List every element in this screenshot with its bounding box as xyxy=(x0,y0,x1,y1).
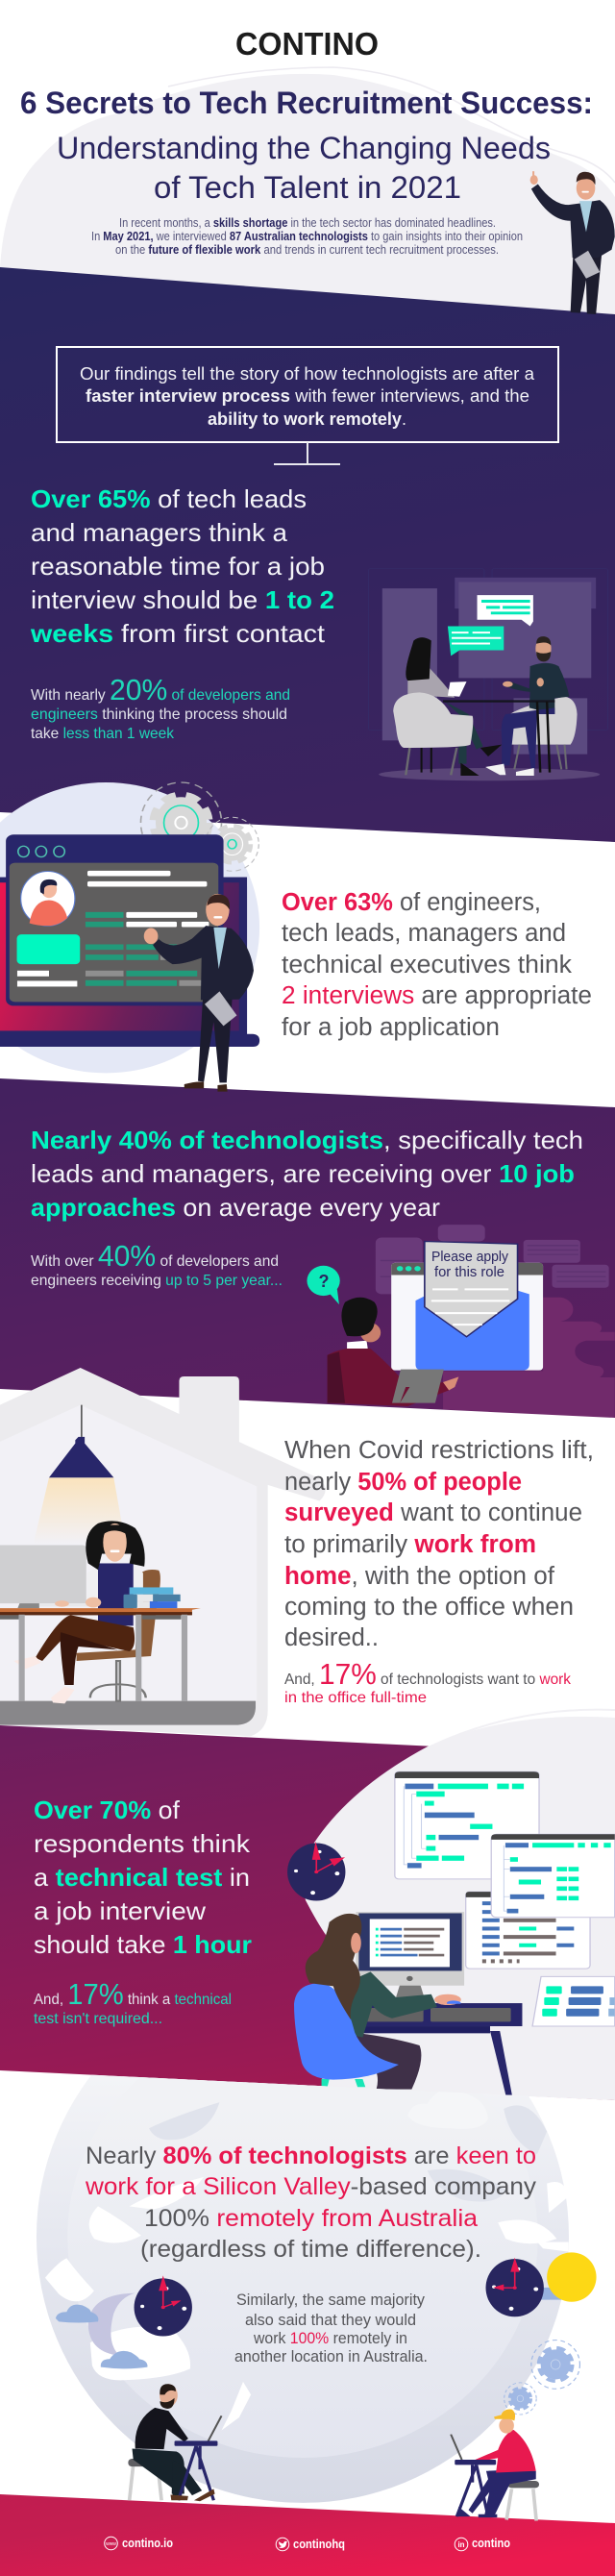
house shell xyxy=(0,1368,326,1736)
callout box xyxy=(57,347,558,464)
white panel: work from home xyxy=(0,1389,615,1755)
text: work from home: When Covid restrictions lift, xyxy=(284,1437,594,1464)
laptop lid and base xyxy=(0,878,247,1035)
footer link: twitter xyxy=(276,2538,345,2551)
text: 17% office: in the office full-time xyxy=(284,1690,427,1706)
callout text xyxy=(80,363,535,429)
title line 2: Understanding the Changing Needs xyxy=(57,131,551,165)
code window 3 xyxy=(466,1892,590,1969)
white panel: Silicon Valley xyxy=(0,2070,615,2523)
footer link: twitter: continohq xyxy=(293,2538,345,2551)
text: similarly xyxy=(234,2291,428,2365)
illustration: time zones and remote workers xyxy=(56,2252,597,2521)
footer link: linkedin: contino xyxy=(472,2537,510,2550)
callout text: faster interview process with fewer interviews, and the xyxy=(86,385,529,406)
text: over 70%: should take 1 hour xyxy=(34,1930,252,1959)
monitor xyxy=(0,1545,86,1608)
text: over 65%: interview should be 1 to 2 xyxy=(31,585,334,614)
presenter man xyxy=(144,894,254,1092)
clock left xyxy=(135,2275,192,2337)
illustration background: technical test blob xyxy=(303,1710,615,2100)
intro paragraph: In recent months, a skills shortage in the tech sector has dominated headlines. xyxy=(119,216,496,230)
text: over 65%: and managers think a xyxy=(31,518,288,547)
browser window xyxy=(391,1263,543,1371)
decorative cloud behind job approaches illustration xyxy=(443,1298,615,1419)
table xyxy=(443,700,554,703)
question mark: ? xyxy=(319,1272,329,1291)
monitor xyxy=(356,1912,464,1997)
lamp xyxy=(34,1405,126,1544)
moon xyxy=(88,2293,135,2356)
chair back right xyxy=(509,697,578,745)
code window 2 xyxy=(491,1834,615,1918)
floor xyxy=(379,768,600,780)
cloud left 1 xyxy=(56,2305,98,2323)
app window xyxy=(6,834,224,1005)
clock right xyxy=(486,2258,544,2316)
person xyxy=(328,1348,449,1406)
title line 3: of Tech Talent in 2021 xyxy=(154,170,461,205)
text: over 70% xyxy=(34,1796,252,1959)
text: 17% technical test xyxy=(34,1977,232,2027)
text: over 65%: Over 65% of tech leads xyxy=(31,484,307,513)
sun xyxy=(547,2252,597,2302)
intro paragraph: In May 2021, we interviewed 87 Australian technologists to gain insights into their opinion xyxy=(91,230,523,243)
interior xyxy=(0,1405,257,1701)
question bubble xyxy=(307,1266,340,1296)
cloud xyxy=(407,2090,488,2129)
title xyxy=(20,86,593,205)
text: nearly 40%: leads and managers, are receiving over 10 job xyxy=(31,1159,575,1188)
text: over 70%: respondents think xyxy=(34,1829,251,1858)
intro paragraph xyxy=(91,216,523,257)
text: nearly 20% xyxy=(31,673,290,742)
text: over 63%: for a job application xyxy=(282,1014,500,1041)
text: work from home xyxy=(284,1437,594,1651)
footer link: website: contino.io xyxy=(122,2537,173,2550)
logo: CONTINO xyxy=(235,26,379,62)
text: similarly: work 100% remotely in xyxy=(253,2329,407,2347)
text: nearly 20%: With nearly 20% of developers and xyxy=(31,673,290,706)
text: work from home: home, with the option of xyxy=(284,1563,555,1590)
text: 17% technical test: test isn't required... xyxy=(34,2011,162,2027)
text: over 70%: a technical test in xyxy=(34,1863,250,1892)
letter xyxy=(425,1241,518,1337)
footer link: website: www xyxy=(106,2541,116,2547)
clock xyxy=(287,1842,345,1900)
gear small xyxy=(206,817,258,871)
text: work from home: to primarily work from xyxy=(284,1531,536,1558)
gear large xyxy=(140,782,222,863)
text: work from home: desired.. xyxy=(284,1624,379,1651)
profile rows xyxy=(17,871,209,986)
white panel: interviews xyxy=(0,812,615,1107)
floor xyxy=(0,1701,256,1725)
letter text line 2: for this role xyxy=(434,1264,504,1280)
globe inner light xyxy=(125,2077,488,2458)
text: similarly: also said that they would xyxy=(245,2311,416,2329)
icon: presenter man top xyxy=(530,171,615,314)
text: over 65% xyxy=(30,484,334,648)
text: nearly 40% xyxy=(31,1126,583,1222)
illustration: technical test xyxy=(287,1771,615,2095)
text: over 40% xyxy=(31,1239,283,1289)
text: similarly: another location in Australia. xyxy=(234,2347,428,2365)
text: over 40%: With over 40% of developers and xyxy=(31,1239,279,1273)
person right xyxy=(451,2409,539,2521)
text: over 65%: weeks from first contact xyxy=(30,619,326,648)
text: nearly 80%: 100% remotely from Australia xyxy=(144,2205,478,2232)
sun cloud xyxy=(533,2288,565,2300)
illustration: job approach email xyxy=(307,1225,609,1406)
text: over 63%: Over 63% of engineers, xyxy=(282,889,541,916)
text: nearly 80%: (regardless of time difference). xyxy=(140,2236,481,2263)
text: work from home: coming to the office when xyxy=(284,1594,574,1621)
callout text: ability to work remotely. xyxy=(208,409,406,429)
man xyxy=(485,636,569,776)
text: nearly 80%: work for a Silicon Valley -based company xyxy=(85,2173,537,2200)
footer xyxy=(105,2537,510,2551)
hero blob xyxy=(0,67,615,317)
books and mug xyxy=(124,1587,181,1608)
text: nearly 80% xyxy=(85,2143,537,2263)
woman xyxy=(13,1521,145,1703)
code window 1 xyxy=(395,1771,539,1879)
text: over 63%: tech leads, managers and xyxy=(282,920,566,947)
text: 17% technical test: And, 17% think a technical xyxy=(34,1977,232,2011)
illustration: interview meeting xyxy=(369,569,607,780)
text: over 63%: 2 interviews are appropriate xyxy=(282,982,592,1009)
text: over 63% xyxy=(282,889,592,1041)
globe xyxy=(37,2074,569,2503)
intro paragraph: on the future of flexible work and trends in current tech recruitment processes. xyxy=(115,243,499,257)
text: work from home: surveyed want to continue xyxy=(284,1499,582,1526)
text: work from home: nearly 50% of people xyxy=(284,1469,522,1496)
text: nearly 40%: approaches on average every year xyxy=(31,1193,440,1222)
footer link: website xyxy=(105,2537,173,2550)
title line 1: 6 Secrets to Tech Recruitment Success: xyxy=(20,86,593,120)
woman xyxy=(406,637,502,776)
letter text: Please apply xyxy=(431,1249,508,1265)
gears blue xyxy=(504,2341,579,2415)
continents xyxy=(45,2177,569,2431)
chair left xyxy=(393,692,473,748)
speech bubble white xyxy=(478,595,533,626)
text: 17% office: And, 17% of technologists want to work xyxy=(284,1657,572,1691)
woman chair xyxy=(77,1570,160,1661)
footer link: linkedin xyxy=(455,2537,510,2551)
illustration: house and woman at desk xyxy=(0,1368,326,1736)
text: nearly 20%: take less than 1 week xyxy=(31,726,175,742)
text: over 70%: a job interview xyxy=(34,1896,206,1925)
code window 4 xyxy=(532,1976,615,2026)
illustration: laptop and presenter xyxy=(0,782,259,1092)
man left xyxy=(128,2384,222,2501)
callout text: Our findings tell the story of how technologists are after a xyxy=(80,363,535,384)
footer link: linkedin: in xyxy=(457,2540,465,2549)
text: similarly: Similarly, the same majority xyxy=(236,2291,425,2309)
text: nearly 80%: Nearly 80% of technologists are keen to xyxy=(86,2143,536,2169)
speech bubble teal xyxy=(448,626,504,656)
chimney xyxy=(179,1376,239,1471)
text: over 70%: Over 70% of xyxy=(34,1796,181,1824)
text: 17% office xyxy=(284,1657,572,1706)
desk xyxy=(0,1608,201,1701)
woman coder xyxy=(294,1914,461,2090)
text: over 65%: reasonable time for a job xyxy=(31,552,325,581)
text: over 40%: engineers receiving up to 5 per year... xyxy=(31,1273,283,1289)
envelope xyxy=(415,1275,529,1371)
desk xyxy=(353,2003,522,2095)
cloud left 2 xyxy=(101,2351,147,2368)
text: over 63%: technical executives think xyxy=(282,952,572,978)
avatar xyxy=(21,872,75,926)
text: nearly 20%: engineers thinking the process should xyxy=(31,706,287,723)
text: nearly 40%: Nearly 40% of technologists , specifically tech xyxy=(31,1126,583,1154)
